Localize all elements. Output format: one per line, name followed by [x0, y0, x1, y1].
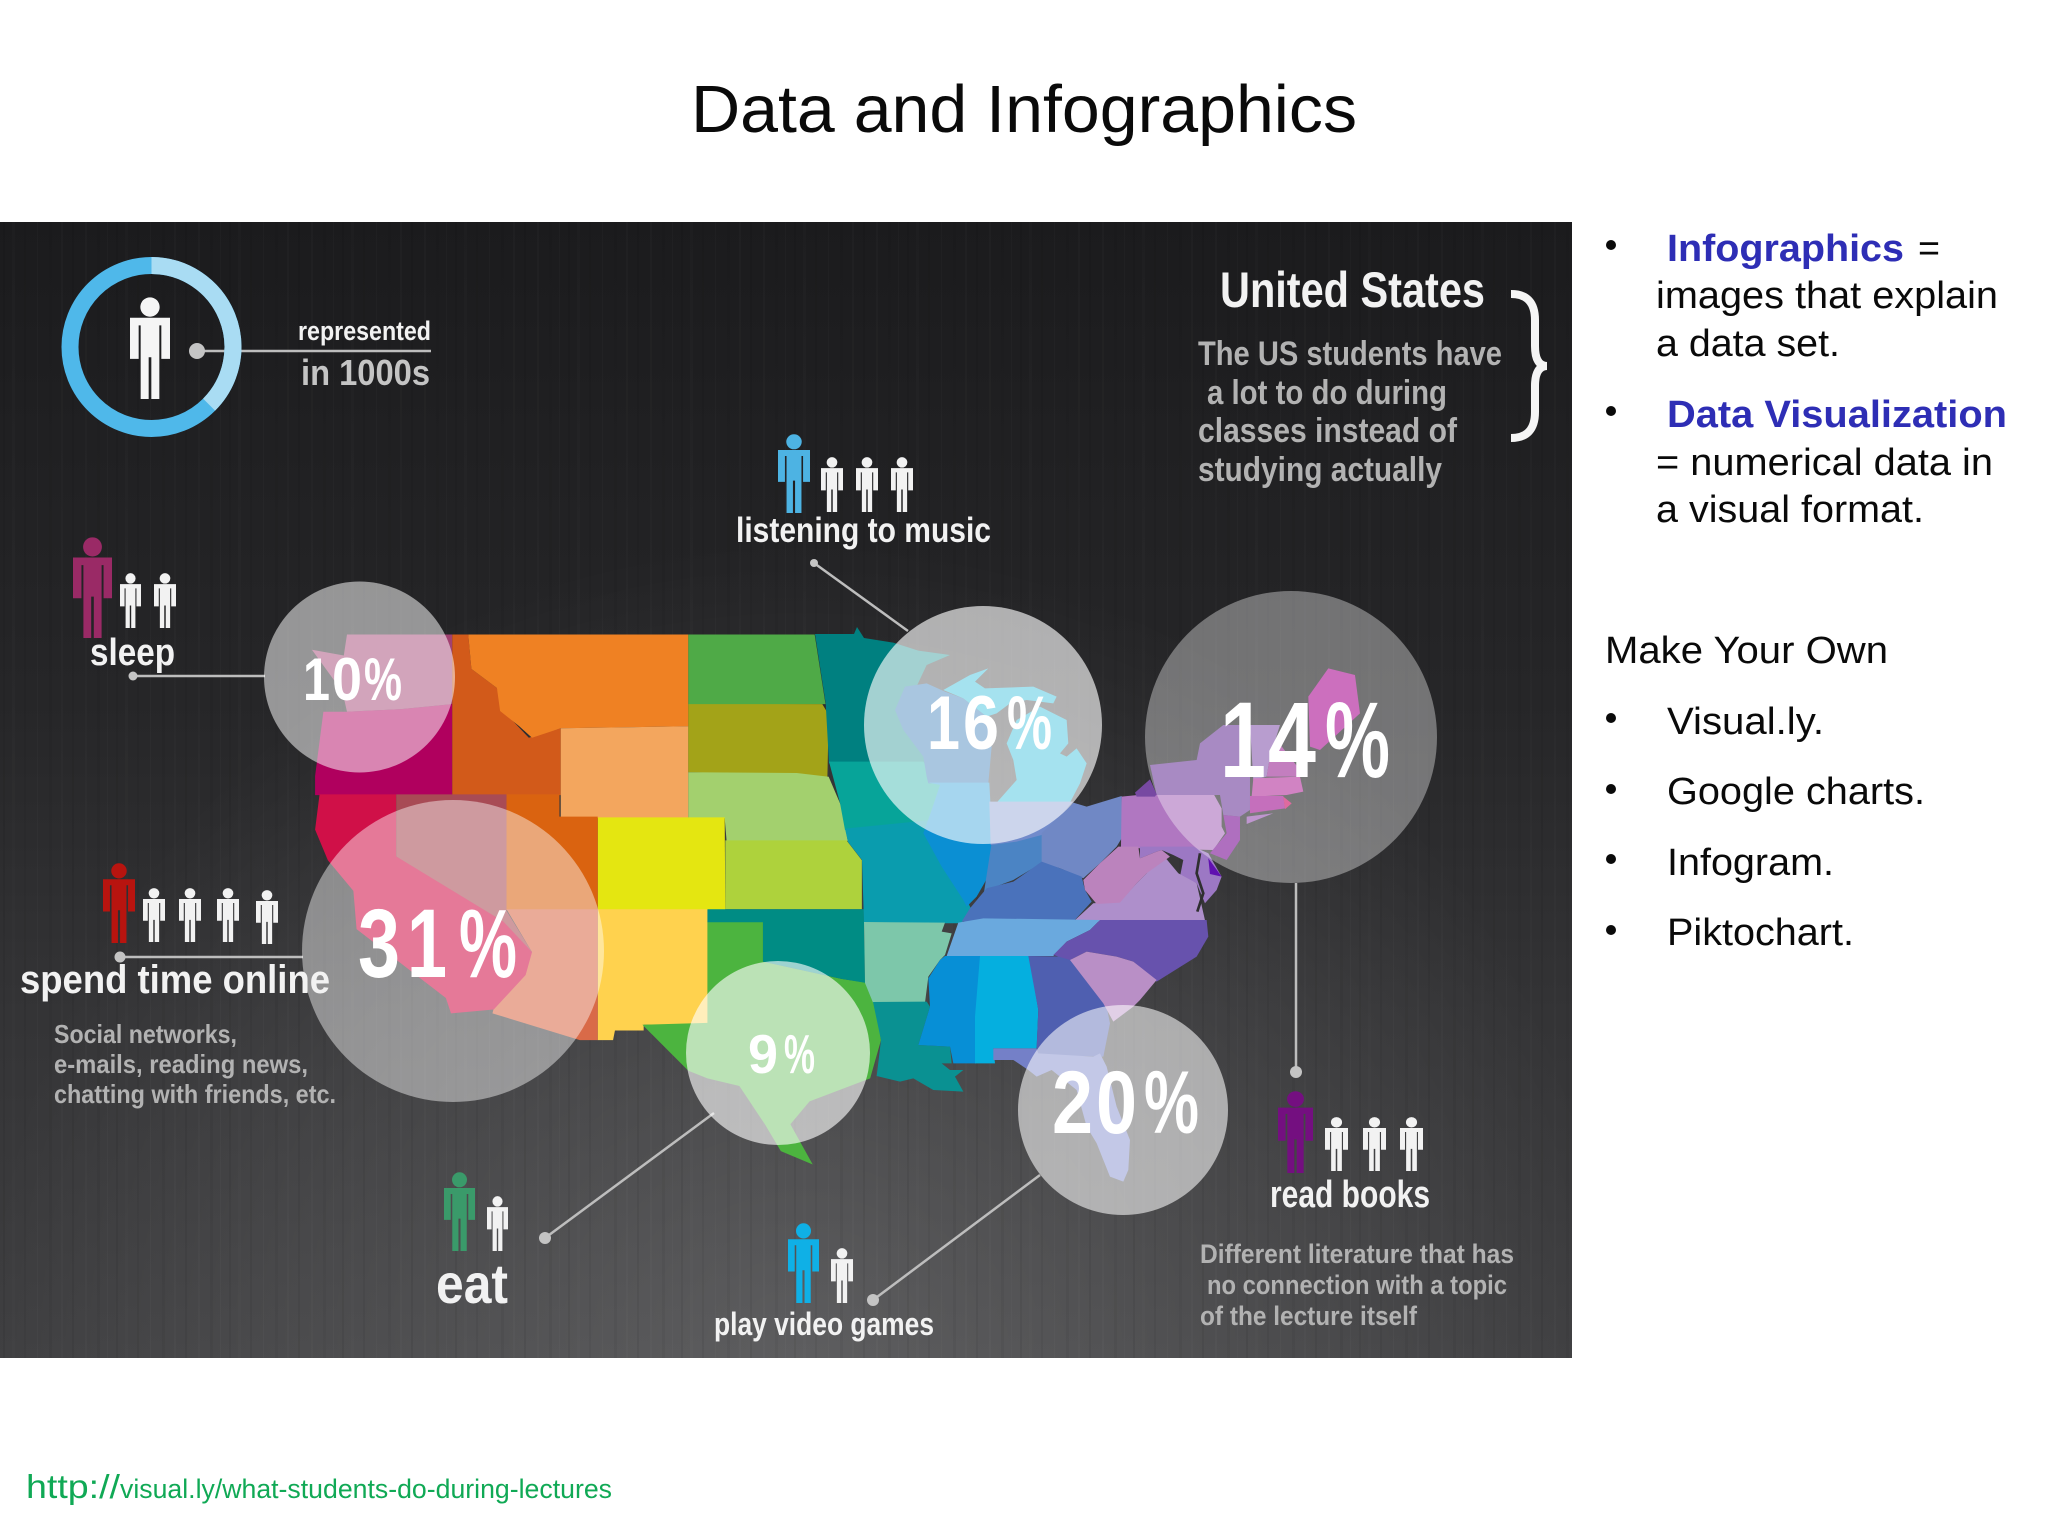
bullet — [1606, 713, 1616, 723]
label: eat — [436, 1252, 508, 1315]
description: US students: classes instead of — [1198, 412, 1458, 450]
description — [1200, 1239, 1514, 1331]
connector dot — [114, 952, 126, 962]
legend: represented in 1000s — [70, 266, 431, 428]
text block: make your own — [1605, 630, 1925, 954]
group: listening to music — [736, 434, 991, 567]
percentage: 31%: 1 — [407, 889, 447, 998]
group: spend time online — [20, 863, 336, 1109]
percentage: 9%: 9 — [748, 1023, 778, 1085]
bullet — [1606, 406, 1616, 416]
label: listening to music — [736, 511, 991, 550]
people icons — [73, 537, 176, 638]
legend dot — [189, 343, 205, 359]
percentage: 31%: 3 — [358, 889, 400, 998]
description: Social networks, — [54, 1019, 237, 1049]
title: Data and Infographics — [691, 72, 1357, 147]
group: read books — [1200, 1066, 1514, 1331]
definition line: a visual format. — [1656, 489, 1924, 531]
icon: legend person — [130, 297, 170, 399]
connector dot — [128, 672, 138, 680]
list item: Piktochart. — [1667, 912, 1854, 954]
percentage: 14% — [1220, 679, 1390, 800]
icon: legend ring — [70, 266, 233, 428]
group: eat — [436, 1172, 551, 1315]
percentage: 10%: 1 — [303, 646, 330, 713]
circle: spend time online 31% — [302, 800, 604, 1102]
percentage: 9% — [748, 1023, 815, 1085]
Data Visualization term: Data Visualization — [1667, 394, 2007, 436]
percentage: 14%: 1 — [1220, 679, 1266, 800]
southern states — [864, 918, 1208, 1182]
source URL: http:// — [26, 1468, 121, 1505]
percentage: 20% — [1052, 1052, 1199, 1152]
group: play video games — [714, 1223, 934, 1342]
description: US students: studying actually — [1198, 451, 1442, 489]
connector dot — [810, 559, 818, 567]
heading block: United States — [1198, 262, 1547, 489]
source URL: visual.ly/what-students-do-during-lectures — [120, 1474, 612, 1504]
percentage: 20%: 2 — [1052, 1052, 1093, 1152]
label: play video games — [714, 1306, 934, 1342]
list item: Infogram. — [1667, 842, 1834, 884]
bullet — [1606, 784, 1616, 794]
bullet — [1606, 854, 1616, 864]
people icons — [103, 863, 278, 944]
heading: Make Your Own — [1605, 630, 1888, 672]
group: sleep — [73, 537, 176, 680]
description: no connection with a topic — [1207, 1270, 1507, 1300]
panel: infographic image — [0, 222, 1572, 1358]
definition line: images that explain — [1656, 275, 1998, 317]
circle: sleep 10% — [264, 582, 455, 772]
legend text: represented: represented — [298, 316, 431, 346]
percentage: 20%: 0 — [1096, 1052, 1137, 1152]
circle: read books 14% — [1145, 591, 1437, 883]
circle: eat 9% — [686, 961, 870, 1145]
label: read books — [1270, 1174, 1430, 1216]
curly brace — [1511, 294, 1547, 438]
people icons — [1278, 1091, 1423, 1173]
percentage: 16%: 1 — [927, 681, 960, 766]
definition line: a data set. — [1656, 323, 1840, 365]
people icons — [778, 434, 913, 513]
heading: United States: United States — [1220, 262, 1485, 318]
map of the United States — [312, 627, 1360, 1182]
definition line: = numerical data in — [1656, 442, 1993, 484]
New England states — [1150, 668, 1360, 860]
Infographics definition: = — [1918, 228, 1940, 270]
description: chatting with friends, etc. — [54, 1079, 336, 1109]
label: spend time online — [20, 958, 330, 1002]
circle: play video games 20% — [1018, 1005, 1228, 1215]
text block: definitions — [1606, 228, 2007, 531]
description: Different literature that has — [1200, 1239, 1514, 1269]
people icons — [444, 1172, 508, 1251]
percentage: 20%: % — [1144, 1052, 1199, 1152]
Infographics definition: Infographics — [1667, 228, 1904, 270]
bullet — [1606, 240, 1616, 250]
bullet — [1606, 925, 1616, 935]
percentage: 16%: 6 — [963, 681, 999, 766]
percentage: 10%: % — [364, 646, 402, 713]
list item: Google charts. — [1667, 771, 1925, 813]
connector dot — [867, 1294, 879, 1306]
percentage: 16%: % — [1007, 681, 1052, 766]
percentage: 10% — [303, 646, 402, 713]
percentage: 16% — [927, 681, 1052, 766]
midwest and northeast states — [815, 627, 1225, 923]
connector dot — [539, 1232, 551, 1244]
percentage: 14%: 4 — [1268, 679, 1316, 800]
description — [54, 1019, 336, 1109]
source URL — [26, 1468, 612, 1505]
percentage: 10%: 0 — [332, 646, 362, 713]
description: US students — [1198, 335, 1502, 489]
legend text: in 1000s: in 1000s — [301, 352, 430, 393]
description: e-mails, reading news, — [54, 1049, 308, 1079]
description: US students: a lot to do during — [1207, 374, 1447, 412]
description: US students: The US students have — [1198, 335, 1502, 373]
percentage: 31%: % — [459, 889, 517, 998]
circle: listening to music 16% — [864, 606, 1102, 844]
percentage: 14%: % — [1325, 679, 1390, 800]
percentage: 31% — [358, 889, 517, 998]
description: of the lecture itself — [1200, 1301, 1418, 1331]
label: sleep — [90, 632, 175, 674]
connector dot — [1290, 1066, 1302, 1078]
percentage: 9%: % — [784, 1023, 815, 1085]
people icons — [788, 1223, 853, 1303]
connector lines — [120, 351, 1296, 1300]
list item: Visual.ly. — [1667, 701, 1824, 743]
